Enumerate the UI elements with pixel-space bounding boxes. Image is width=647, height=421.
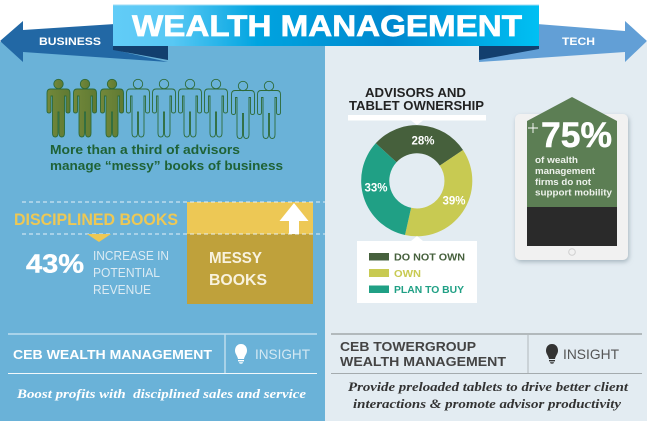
- tablet with stat: management: [535, 166, 596, 177]
- insight header: business: [8, 334, 317, 374]
- title bar: [348, 115, 486, 125]
- donut chart: [361, 125, 472, 236]
- arrow: business: BUSINESS: [39, 36, 101, 48]
- stat: 43 percent: INCREASE IN: [93, 249, 169, 263]
- tablet with stat: of wealth: [535, 155, 578, 166]
- arrow: tech: TECH: [562, 36, 595, 48]
- people pictogram: [47, 79, 280, 138]
- messy books bar: MESSY: [209, 250, 262, 267]
- donut chart: 33%: [364, 182, 388, 194]
- legend: OWN: [394, 268, 421, 280]
- people caption: manage “messy” books of business: [50, 159, 283, 173]
- messy books bar: BOOKS: [209, 272, 267, 289]
- title ribbon: WEALTH MANAGEMENT: [132, 10, 522, 43]
- stat: 43 percent: POTENTIAL: [93, 266, 160, 280]
- people caption: More than a third of advisors: [50, 143, 240, 157]
- chart title: TABLET OWNERSHIP: [349, 99, 484, 113]
- legend: [357, 236, 477, 303]
- insight header: tech: WEALTH MANAGEMENT: [340, 354, 506, 369]
- tablet with stat: firms do not: [535, 177, 592, 188]
- title ribbon: [113, 4, 539, 46]
- panel: tech: [325, 42, 647, 421]
- stat: 43 percent: 43%: [26, 248, 84, 278]
- donut chart: 39%: [442, 196, 466, 208]
- insight header: tech: CEB TOWERGROUP: [340, 339, 476, 354]
- arrow: up: [280, 203, 308, 234]
- disciplined books heading: [14, 211, 178, 242]
- insight text: tech: [348, 379, 628, 411]
- people caption: [50, 143, 283, 173]
- arrow: tech: [479, 21, 647, 62]
- donut chart: 28%: [411, 136, 435, 148]
- tablet with stat: 75%: [541, 116, 612, 155]
- legend: PLAN TO BUY: [394, 284, 464, 296]
- insight text: tech: interactions & promote advisor productivity: [353, 396, 621, 411]
- insight header: tech: INSIGHT: [563, 346, 619, 362]
- legend: DO NOT OWN: [394, 252, 465, 264]
- stat: 43 percent: [26, 248, 169, 297]
- panel: business: [0, 42, 325, 421]
- tablet with stat: [515, 97, 628, 260]
- arrow: business: [0, 21, 168, 62]
- insight text: business: Boost profits with disciplined sales and service: [16, 386, 306, 401]
- tablet with stat: support mobility: [535, 188, 613, 198]
- chart title: ADVISORS AND: [365, 86, 466, 100]
- stat: 43 percent: REVENUE: [93, 283, 151, 297]
- messy books bar: [187, 202, 313, 304]
- chart title: [349, 86, 484, 113]
- insight text: tech: Provide preloaded tablets to drive better client: [348, 379, 628, 394]
- insight header: business: INSIGHT: [255, 346, 310, 362]
- disciplined books heading: DISCIPLINED BOOKS: [14, 211, 178, 229]
- insight header: business: CEB WEALTH MANAGEMENT: [13, 347, 212, 362]
- insight header: tech: [331, 334, 642, 374]
